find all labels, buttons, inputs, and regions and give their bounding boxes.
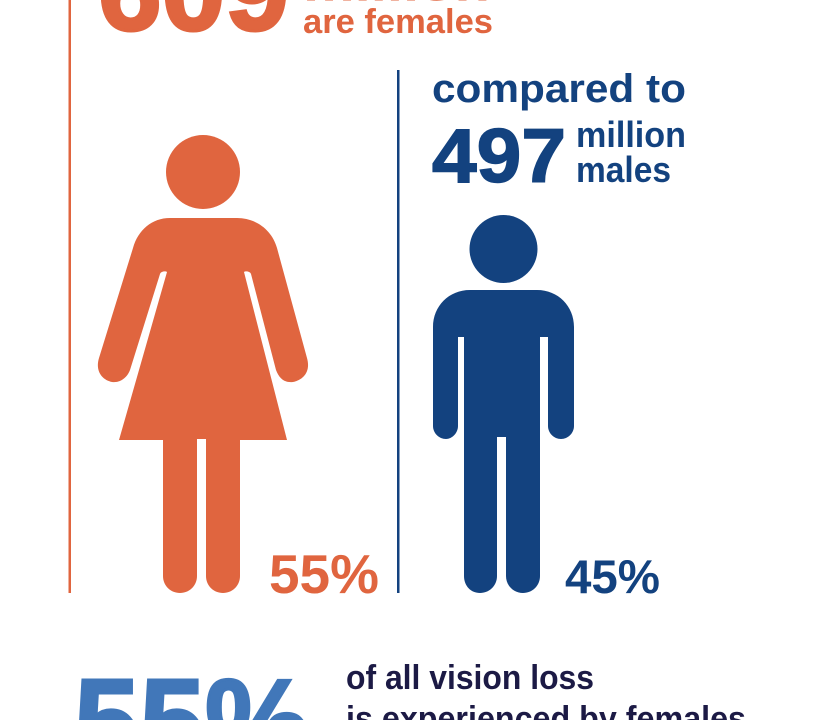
heading: compared to 497 million males: compared to: [432, 67, 686, 111]
heading: compared to 497 million males: 497: [432, 114, 566, 199]
heading: 609 million are females: [98, 0, 493, 54]
icon: male figure: [433, 215, 574, 593]
text block: vision loss statement: [346, 659, 746, 720]
callout: 55% of all vision loss: [74, 653, 746, 720]
heading: 609 million are females: are females: [303, 3, 493, 41]
heading: compared to 497 million males: million: [576, 114, 686, 155]
divider line: females: [68, 0, 71, 593]
heading: compared to 497 million males: [432, 67, 686, 199]
value: 45%: 45%: [565, 550, 660, 603]
divider line: males: [397, 70, 400, 593]
panel: females: [68, 0, 493, 605]
heading: compared to 497 million males: males: [576, 149, 671, 190]
text block: vision loss statement: of all vision loss: [346, 659, 594, 697]
panel: males: [397, 67, 686, 603]
value: 55%: 55%: [269, 543, 379, 605]
icon: female figure: [98, 135, 308, 593]
